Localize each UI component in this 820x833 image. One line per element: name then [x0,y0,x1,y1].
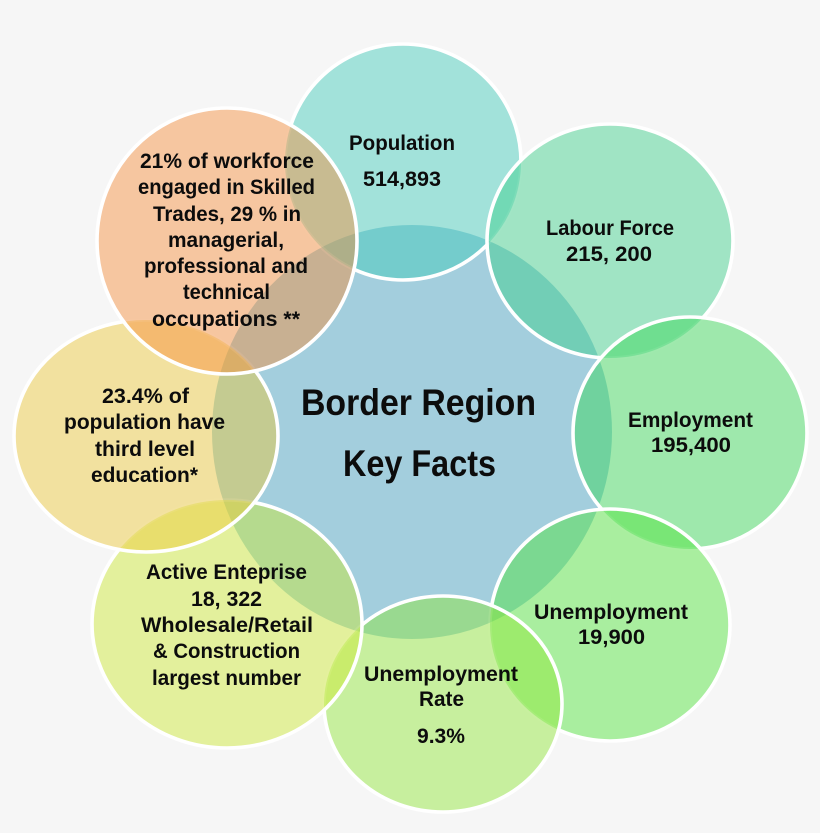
panel: unemployment rate: 9.3% [417,725,465,748]
panel: population: Population [349,132,455,155]
panel: employment: 195,400 [651,434,731,457]
panel: skilled trades: Trades, 29 % in [153,203,301,226]
panel: labour force: Labour Force [546,217,674,240]
panel: active enterprise: largest number [152,667,301,690]
panel: central circle [212,225,612,639]
panel: skilled trades: engaged in Skilled [138,176,315,199]
title: Border Region [301,382,536,423]
panel: skilled trades: 21% of workforce [140,150,314,173]
panel: skilled trades: managerial, [168,229,284,252]
panel: active enterprise: Active Enteprise [146,561,307,584]
panel: skilled trades: professional and [144,255,308,278]
panel: employment [573,317,807,549]
panel: skilled trades: technical [183,281,270,304]
panel: unemployment [490,509,730,741]
panel: unemployment: 19,900 [578,626,645,649]
panel: skilled trades [97,108,357,374]
panel: active enterprise: & Construction [153,640,300,663]
panel: third level education: 23.4% of [102,385,190,408]
title [301,382,536,484]
panel: unemployment rate [324,596,562,812]
title: Key Facts [343,443,496,484]
panel: active enterprise: Wholesale/Retail [141,614,313,637]
panel: employment: Employment [628,409,753,432]
panel: population: 514,893 [363,168,441,191]
panel: active enterprise [92,500,362,748]
panel: third level education: population have [64,411,225,434]
panel: unemployment: Unemployment [534,601,688,624]
panel: third level education: third level [95,438,195,461]
panel: unemployment rate: Unemployment [364,663,518,686]
panel: labour force [487,124,733,358]
panel: population [285,44,521,280]
panel: unemployment rate: Rate [419,688,464,711]
panel: active enterprise: 18, 322 [191,588,262,611]
panel: labour force: 215, 200 [566,243,652,266]
panel: skilled trades: occupations ** [152,308,301,331]
panel: third level education: education* [91,464,199,487]
panel: third level education [14,320,278,552]
